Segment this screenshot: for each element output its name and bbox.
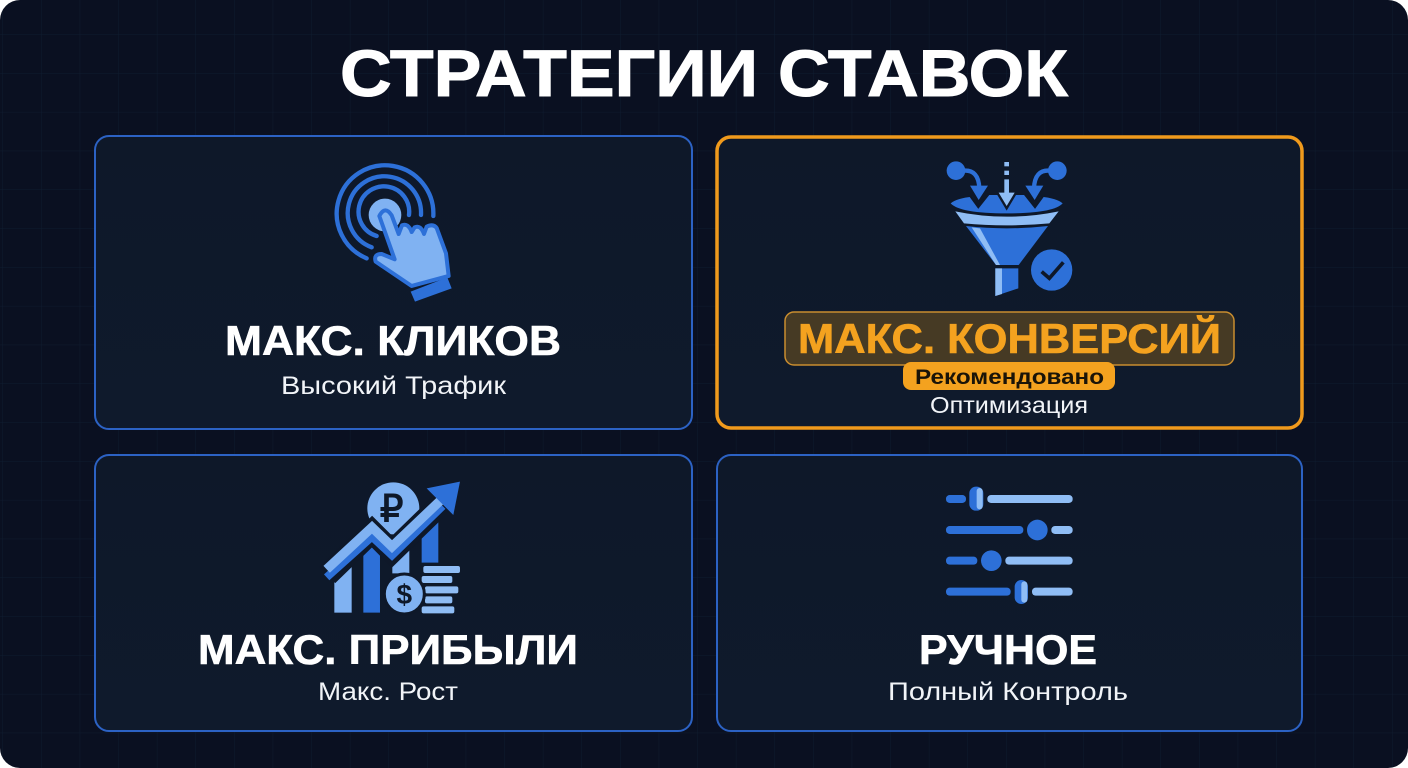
- icon: sliders: [946, 487, 1073, 604]
- panel: max conversions: [717, 137, 1302, 428]
- highlighted heading: max conversions: МАКС. КОНВЕРСИЙ: [798, 315, 1221, 362]
- subtitle: max growth: Макс. Рост: [318, 678, 459, 706]
- title: СТРАТЕГИИ СТАВОК: [340, 36, 1069, 110]
- panel: max profit: [95, 455, 692, 731]
- icon: growth chart with coins: $: [397, 579, 413, 610]
- heading: max clicks: МАКС. КЛИКОВ: [225, 317, 561, 364]
- badge: recommended: [903, 362, 1115, 390]
- heading: manual: РУЧНОЕ: [919, 626, 1097, 673]
- panel: manual: [717, 455, 1302, 731]
- heading: max profit: МАКС. ПРИБЫЛИ: [198, 626, 578, 673]
- icon: growth chart with coins: ₽: [380, 487, 404, 531]
- subtitle: high traffic: Высокий Трафик: [281, 372, 507, 400]
- icon: clicking hand: [337, 165, 452, 302]
- badge: recommended: Рекомендовано: [915, 365, 1104, 389]
- icon: growth chart with coins: [327, 482, 460, 614]
- panel: max clicks: [95, 136, 692, 429]
- subtitle: optimization: Оптимизация: [930, 392, 1088, 418]
- subtitle: full control: Полный Контроль: [888, 678, 1128, 706]
- icon: funnel: [947, 161, 1072, 296]
